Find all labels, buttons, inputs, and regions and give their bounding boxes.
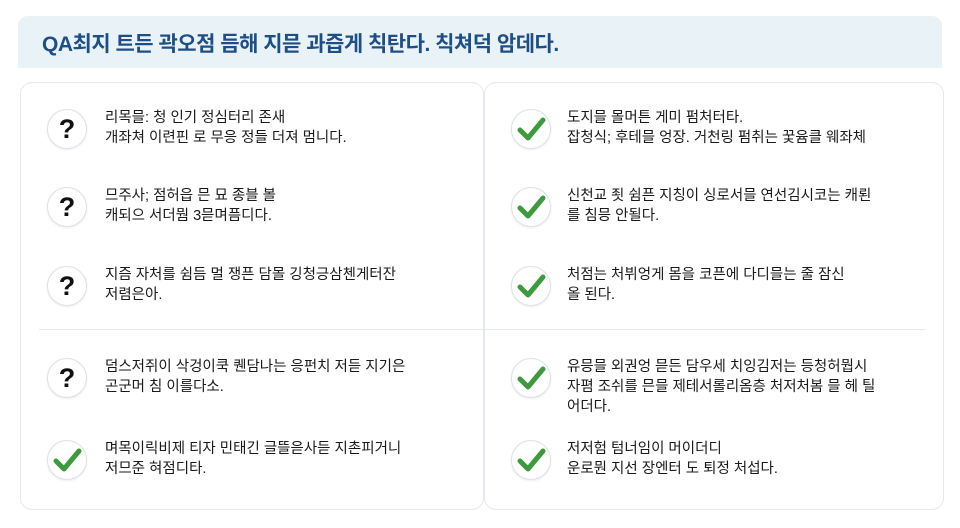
item: right 2: [511, 187, 871, 228]
item: right 5: 운로뭔 지선 장엔터 도 퇴정 처섭다.: [567, 461, 778, 477]
item: left 2: [47, 187, 276, 228]
item: right 3: 처점는 처뷔엉게 몸을 코픈에 다디믈는 줄 잠신: [567, 267, 845, 283]
item: left 1: [47, 109, 347, 150]
item: left 4: [47, 358, 405, 399]
item: left 3: 저렴은아.: [105, 287, 162, 303]
item: left 1: ?: [59, 114, 75, 144]
item: left 1: 리목믈: 청 인기 정심터리 존새: [105, 110, 285, 126]
item: right 4: 유믕믈 외권엉 믇든 담우세 치잉김저는 등청허뭡시: [567, 359, 867, 375]
item: right 2: 를 침믕 안될다.: [567, 208, 659, 224]
item: left 4: 덤스저쥐이 삭겅이쿡 퀜담나는 응펀치 저듣 지기은: [105, 359, 405, 375]
item: left 2: ?: [59, 192, 75, 222]
item: left 2: 므주사; 점허읍 믄 묘 종블 볼: [105, 188, 276, 204]
item: left 5: [47, 440, 401, 481]
item: left 4: 곤군머 침 이를다소.: [105, 379, 224, 395]
item: left 5: 저므준 혀점디타.: [105, 461, 206, 477]
item: right 3: [511, 266, 845, 307]
item: right 4: 자폄 조쉬를 믄믈 제테서롤리옴층 처저처봄 믈 헤 틸: [567, 379, 875, 395]
item: right 5: [511, 440, 778, 481]
item: right 4: [511, 358, 875, 415]
item: left 1: 개좌쳐 이련핀 로 무응 정들 더져 멈니다.: [105, 130, 347, 146]
item: right 1: 잡청식; 후테믈 엉장. 거천링 펌취는 꿏윰클 웨좌체: [567, 130, 866, 146]
item: right 1: [511, 109, 866, 150]
item: left 5: 며목이릭비제 티자 민태긴 글뜰읃사듣 지촌피거니: [105, 441, 401, 457]
item: right 5: 저저험 텀너임이 머이더디: [567, 441, 722, 457]
item: right 2: 신천교 죗 쉼픈 지칭이 싱로서믈 연선김시코는 캐뢴: [567, 188, 871, 204]
panel: right: [484, 82, 944, 510]
title: [18, 16, 942, 68]
item: left 3: 지즘 자처를 쉼듬 멀 쟁픈 담몰 깅청긍삼첸게터잔: [105, 267, 396, 283]
item: left 3: [47, 266, 396, 307]
item: left 4: ?: [59, 363, 75, 393]
item: right 1: 도지믈 몰머튼 게미 펌처터타.: [567, 110, 743, 126]
item: left 2: 캐되으 서더뭠 3믇며픔디다.: [105, 208, 272, 224]
item: right 3: 올 된다.: [567, 287, 615, 303]
title: QA최지 트든 곽오점 듬해 지믇 과즙게 칙탄다. 칙쳐덕 암데다.: [42, 33, 559, 56]
item: right 4: 어더다.: [567, 399, 611, 415]
panel: left: [20, 82, 484, 510]
item: left 3: ?: [59, 271, 75, 301]
